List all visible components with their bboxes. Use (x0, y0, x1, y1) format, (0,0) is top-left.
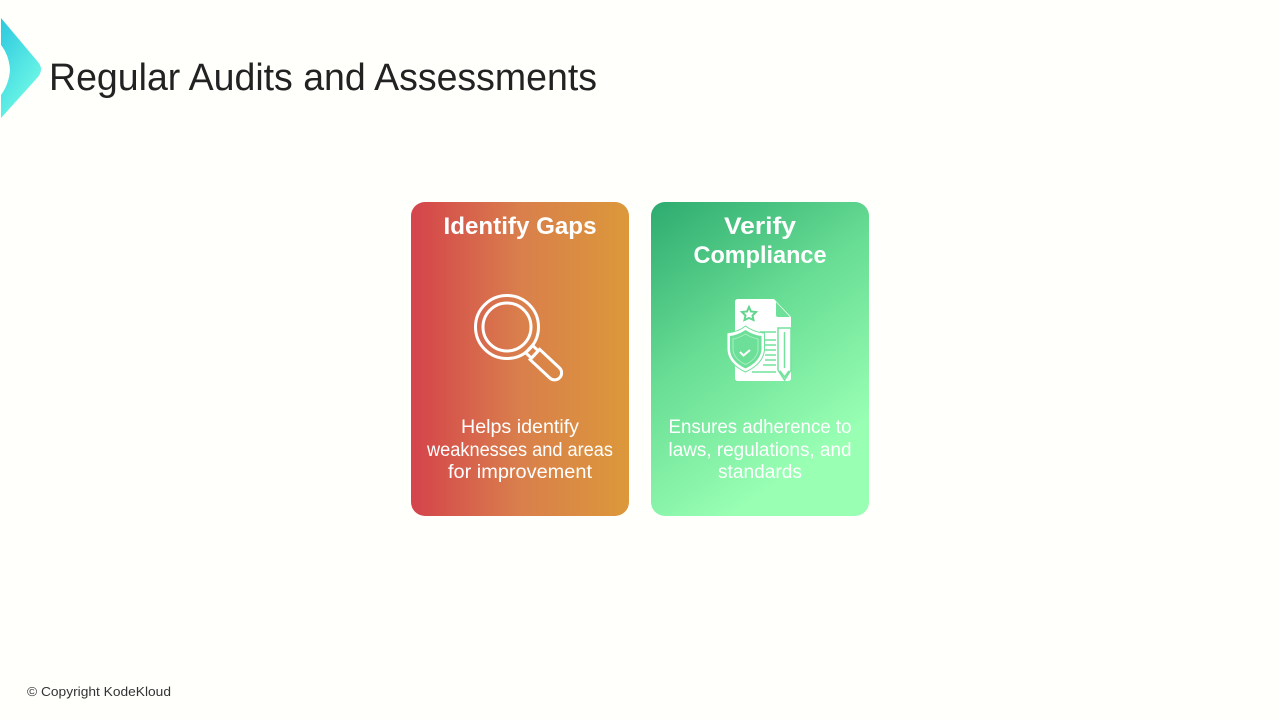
card background (411, 202, 629, 516)
description: standards (718, 462, 802, 483)
description (426, 417, 613, 483)
heading: Identify Gaps (444, 213, 596, 240)
logo chevron (1, 18, 41, 118)
panel: identify gaps (411, 202, 629, 516)
description: laws, regulations, and (668, 440, 852, 461)
heading: Compliance (694, 242, 826, 269)
description: weaknesses and areas (426, 440, 613, 461)
title: Regular Audits and Assessments (49, 57, 597, 99)
panel: verify compliance (651, 202, 869, 516)
description: Helps identify (461, 417, 580, 438)
heading: Verify (724, 213, 797, 240)
footer copyright: © Copyright KodeKloud (27, 684, 171, 699)
card background (651, 202, 869, 516)
heading (694, 213, 826, 269)
description: Ensures adherence to (668, 417, 852, 438)
description (668, 417, 852, 483)
icon: magnifying glass (476, 296, 564, 383)
icon: compliance document (727, 299, 791, 381)
description: for improvement (448, 462, 593, 483)
